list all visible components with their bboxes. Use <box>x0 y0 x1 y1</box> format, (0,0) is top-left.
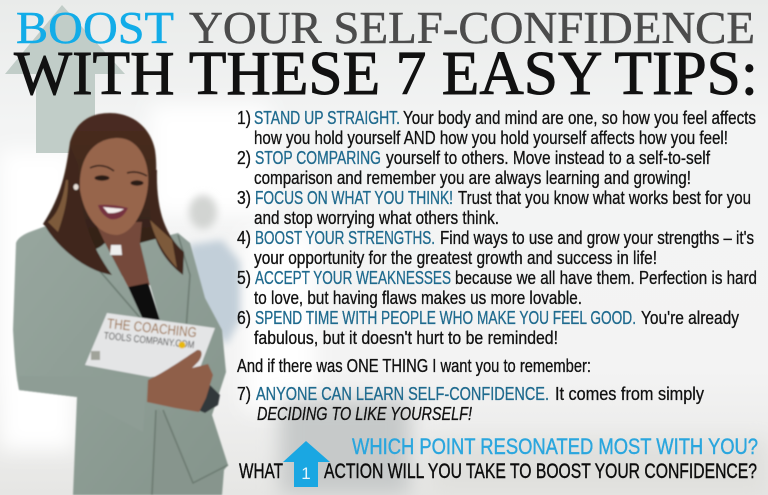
booklet logo <box>103 315 198 351</box>
tip 7: 7) <box>237 384 251 404</box>
booklet <box>85 313 215 377</box>
title: WITH THESE 7 EASY TIPS: <box>14 40 758 108</box>
blurred background figures <box>0 105 768 495</box>
blazer <box>13 223 228 495</box>
tip 3: and stop worrying what others think. <box>254 208 499 228</box>
tip 1: STAND UP STRAIGHT. <box>254 108 400 128</box>
icon: blue arrow with number 1: 1 <box>301 464 311 483</box>
tip 1: 1) <box>237 108 251 128</box>
hand <box>147 350 213 412</box>
tip 7: DECIDING TO LIKE YOURSELF! <box>257 404 472 424</box>
tip 3: FOCUS ON WHAT YOU THINK! <box>255 188 453 208</box>
jacket shadows and seams <box>62 230 228 495</box>
tip 4 <box>237 228 754 268</box>
facial features <box>74 166 147 219</box>
tip 2: 2) <box>237 148 251 168</box>
tip 6: SPEND TIME WITH PEOPLE WHO MAKE YOU FEEL GOOD. <box>255 308 636 328</box>
icon: large background arrow <box>5 5 125 153</box>
title: BOOST <box>16 3 174 53</box>
title <box>14 3 758 108</box>
tip 1 <box>237 108 756 148</box>
hair back <box>43 113 183 276</box>
tip 4: 4) <box>237 228 251 248</box>
black top <box>128 283 160 320</box>
tip 5: to love, but having flaws makes us more lovable. <box>254 288 582 308</box>
neck and chest <box>95 222 150 287</box>
tip 3: 3) <box>237 188 251 208</box>
sleeve <box>19 376 147 432</box>
necklace pendant <box>110 245 122 255</box>
icon: blue arrow with number 1 <box>283 441 330 487</box>
tip 5: 5) <box>237 268 251 288</box>
tip 4: your opportunity for the greatest growth and success in life! <box>254 248 657 268</box>
photo: businesswoman holding a booklet <box>13 113 228 495</box>
cuff <box>198 385 220 413</box>
tip 3 <box>237 188 751 228</box>
tip 7 <box>237 384 704 424</box>
call to action: what action: WHAT <box>239 460 283 483</box>
tip 5: ACCEPT YOUR WEAKNESSES <box>255 268 451 288</box>
intro to final tip: And if there was ONE THING I want you to remember: <box>237 356 591 376</box>
trousers <box>150 408 222 495</box>
title: YOUR SELF-CONFIDENCE <box>189 3 755 53</box>
face <box>80 138 148 235</box>
tip 2: comparison and remember you are always learning and growing! <box>254 168 691 188</box>
tip 2 <box>237 148 711 188</box>
tip 2: yourself to others. Move instead to a self-to-self <box>386 148 711 168</box>
booklet logo: THE COACHING <box>106 315 198 340</box>
tip 7: ANYONE CAN LEARN SELF-CONFIDENCE. <box>256 384 549 404</box>
booklet logo: TOOLS COMPANY.COM <box>103 331 195 351</box>
tip 6: 6) <box>237 308 251 328</box>
tip 7: It comes from simply <box>555 384 704 404</box>
tip 6: fabulous, but it doesn't hurt to be reminded! <box>254 328 558 348</box>
tip 6: You're already <box>641 308 739 328</box>
tip 2: STOP COMPARING <box>255 148 381 168</box>
hair front strands <box>44 145 184 275</box>
tip 5 <box>237 268 757 308</box>
tip 4: BOOST YOUR STRENGTHS. <box>255 228 435 248</box>
tip 6 <box>237 308 739 348</box>
